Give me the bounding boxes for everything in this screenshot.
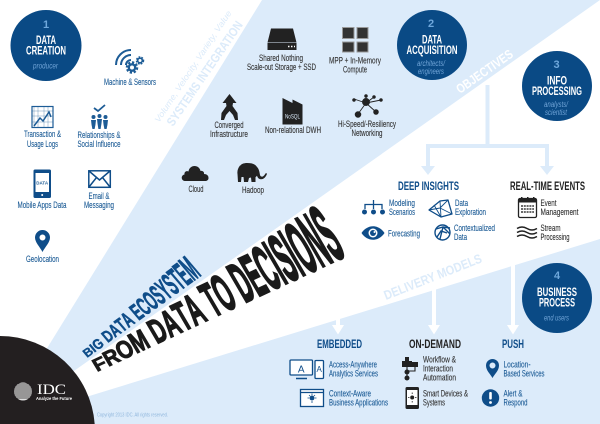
circle 4: business process: 4 xyxy=(554,270,561,282)
label: modeling scenarios: Modeling xyxy=(389,198,415,208)
icon: geolocation pin xyxy=(35,230,50,252)
label: alert and respond xyxy=(504,388,528,408)
title: big data ecosystem: B xyxy=(80,344,96,360)
icon: forecasting eye xyxy=(362,226,384,240)
title: from data to decisions: A xyxy=(153,301,188,345)
title: big data ecosystem: T xyxy=(162,264,192,296)
circle 1: data creation: DATA xyxy=(36,35,56,47)
heading: on-demand: ON-DEMAND xyxy=(409,339,461,351)
label: contextualized data: Data xyxy=(454,232,468,242)
label: converged infrastructure: Infrastructure xyxy=(210,129,248,139)
label: workflow automation: Interaction xyxy=(423,364,453,374)
title: big data ecosystem: T xyxy=(111,314,132,336)
heading: embedded: EMBEDDED xyxy=(317,339,362,351)
label: workflow automation xyxy=(423,354,456,382)
circle 2: data acquisition xyxy=(397,10,467,80)
icon: alert xyxy=(482,389,499,407)
icon: stream waves xyxy=(517,227,537,238)
label: modeling scenarios xyxy=(389,198,415,217)
title: big data ecosystem: E xyxy=(166,257,199,292)
circle 3: info processing: scientist xyxy=(545,107,567,117)
icon: context-aware window xyxy=(300,390,324,406)
title: from data to decisions: O xyxy=(200,263,246,322)
title: big data ecosystem: S xyxy=(156,269,186,301)
circle 3: info processing: 3 xyxy=(553,59,560,71)
title: from data to decisions: I xyxy=(269,219,315,290)
circle 2: data acquisition: DATA xyxy=(422,34,442,46)
title: from data to decisions: F xyxy=(89,353,111,376)
label: smart devices: Smart Devices & xyxy=(423,388,468,398)
title: big data ecosystem: C xyxy=(131,294,157,321)
circle 3: info processing xyxy=(522,51,592,121)
icon: location pin xyxy=(486,359,499,378)
icon: NoSQL factory: NoSQL xyxy=(285,114,300,120)
band label: delivery models: DELIVERY MODELS xyxy=(382,251,484,303)
icon: data exploration xyxy=(429,200,452,217)
circle 4: business process xyxy=(522,263,592,333)
label: event management: Management xyxy=(540,207,579,217)
logo: IDC: Analyze the Future xyxy=(36,396,72,402)
heading: push: PUSH xyxy=(502,339,524,351)
icon: modeling scenarios xyxy=(362,200,385,214)
title: from data to decisions: T xyxy=(165,293,200,339)
icon: converged arrow xyxy=(221,94,238,120)
circle 1: data creation: CREATION xyxy=(26,46,66,58)
title: from data to decisions: A xyxy=(175,285,214,335)
icon: analytics monitor and tablet xyxy=(290,360,324,378)
label: location-based services: Based Services xyxy=(504,368,545,378)
label: workflow automation: Workflow & xyxy=(423,354,456,364)
title: big data ecosystem: E xyxy=(126,300,149,326)
icon: contextualized data globe xyxy=(435,225,450,240)
label: forecasting: Forecasting xyxy=(388,228,420,238)
icon: elephant xyxy=(237,163,267,182)
label: event management: Event xyxy=(540,198,557,208)
label: stream processing: Stream xyxy=(540,223,561,233)
label: transaction and usage logs: Transaction & xyxy=(24,129,61,139)
label: analytics services: Analytics Services xyxy=(329,368,378,378)
icon: relationships xyxy=(91,105,108,129)
label: analytics services xyxy=(329,360,378,378)
label: networking: Networking xyxy=(352,128,382,138)
circle 2: data acquisition: 2 xyxy=(428,18,434,30)
title: from data to decisions: C xyxy=(241,234,291,304)
label: data exploration xyxy=(455,198,486,217)
label: storage: Scale-out Storage + SSD xyxy=(247,62,316,72)
circle 1: data creation xyxy=(10,10,82,81)
title: from data to decisions: R xyxy=(99,344,124,371)
label: alert and respond: Respond xyxy=(504,398,528,408)
band label: systems integration: SYSTEMS INTEGRATION xyxy=(164,19,246,129)
icon: analytics monitor and tablet: A xyxy=(317,365,323,374)
circle 2: data acquisition: engineers xyxy=(418,66,444,76)
label: stream processing: Processing xyxy=(540,232,570,242)
title: big data ecosystem: G xyxy=(89,335,107,353)
title: from data to decisions: O xyxy=(272,208,329,288)
label: storage: Shared Nothing xyxy=(259,53,303,63)
label: hadoop: Hadoop xyxy=(242,185,264,195)
icon: smart device xyxy=(406,387,419,409)
label: contextualized data: Contextualized xyxy=(454,223,495,233)
arrows: delivery models xyxy=(332,260,519,334)
circle 1: data creation: producer xyxy=(32,60,59,70)
label: business applications: Context-Aware xyxy=(329,388,371,398)
title: from data to decisions xyxy=(89,191,356,376)
label: contextualized data xyxy=(454,223,495,242)
label: cloud: Cloud xyxy=(188,184,204,194)
circle 4: business process: end users xyxy=(544,312,569,322)
label: relationships and social influence: Relationships & xyxy=(78,130,120,140)
copyright: Copyright 2013 IDC. All rights reserved. xyxy=(97,412,168,418)
label: MPP compute xyxy=(329,56,381,74)
icon: workflow xyxy=(402,357,418,380)
label: data exploration: Exploration xyxy=(455,207,486,217)
title: big data ecosystem: Y xyxy=(149,274,178,305)
icon: transaction chart xyxy=(32,106,53,128)
label: email and messaging: Messaging xyxy=(84,200,114,210)
title: from data to decisions: S xyxy=(297,191,356,276)
title: from data to decisions: T xyxy=(192,275,231,328)
circle 4: business process: PROCESS xyxy=(539,298,575,310)
title: from data to decisions: D xyxy=(219,252,265,314)
icon: email xyxy=(89,171,110,187)
label: event management xyxy=(540,198,579,217)
circle 2: data acquisition: architects/ xyxy=(417,58,446,68)
title: big data ecosystem: M xyxy=(172,249,207,287)
label: transaction and usage logs xyxy=(24,129,61,149)
icon: NoSQL factory xyxy=(282,98,302,124)
label: geolocation: Geolocation xyxy=(26,254,59,264)
logo panel: black quarter circle xyxy=(0,336,95,424)
label: email and messaging: Email & xyxy=(88,191,110,201)
label: storage xyxy=(247,53,316,72)
title: from data to decisions: I xyxy=(253,229,297,297)
heading: deep insights: DEEP INSIGHTS xyxy=(398,181,459,193)
label: workflow automation: Automation xyxy=(423,372,456,382)
label: transaction and usage logs: Usage Logs xyxy=(27,139,58,149)
label: email and messaging xyxy=(84,191,114,210)
icon: analytics monitor and tablet: A xyxy=(298,364,305,376)
icon: event calendar xyxy=(518,197,536,218)
label: converged infrastructure xyxy=(210,120,248,139)
title: from data to decisions: M xyxy=(123,324,155,360)
icon: machine and sensors xyxy=(116,50,143,72)
icon: MPP chips xyxy=(342,28,368,52)
title: big data ecosystem: O xyxy=(137,286,165,316)
label: business applications: Business Applications xyxy=(329,398,388,408)
label: smart devices xyxy=(423,388,468,408)
title: from data to decisions: D xyxy=(142,311,175,351)
icon: storage xyxy=(268,28,296,50)
label: mobile apps data: Mobile Apps Data xyxy=(18,200,67,210)
label: location-based services: Location- xyxy=(504,360,530,370)
band label: objectives: OBJECTIVES xyxy=(453,46,516,96)
title: big data ecosystem: S xyxy=(144,280,171,310)
label: stream processing xyxy=(540,223,570,242)
circle 2: data acquisition: ACQUISITION xyxy=(406,45,458,57)
icon: mobile apps: DATA xyxy=(36,180,49,186)
icon: network xyxy=(353,95,382,117)
title: from data to decisions: S xyxy=(257,221,309,295)
label: MPP compute: MPP + In-Memory xyxy=(329,56,381,66)
label: relationships and social influence xyxy=(78,130,120,149)
title: from data to decisions: N xyxy=(286,200,344,282)
label: machine and sensors: Machine & Sensors xyxy=(104,77,156,87)
title: from data to decisions: E xyxy=(230,242,277,308)
title: big data ecosystem: A xyxy=(116,308,139,332)
label: MPP compute: Compute xyxy=(343,64,367,74)
logo: IDC: IDC xyxy=(37,382,66,398)
panel: lower light blue band xyxy=(60,239,600,424)
label: smart devices: Systems xyxy=(423,398,445,408)
title: big data ecosystem xyxy=(80,249,207,360)
arrows: objectives split xyxy=(421,85,554,175)
label: location-based services xyxy=(504,360,545,378)
label: networking xyxy=(338,119,396,138)
label: converged infrastructure: Converged xyxy=(214,120,244,130)
icon: mobile apps xyxy=(34,170,51,198)
icon: cloud xyxy=(182,166,208,181)
label: networking: Hi-Speed/-Resiliency xyxy=(338,119,396,129)
circle 3: info processing: analysts/ xyxy=(544,99,569,109)
circle 3: info processing: INFO xyxy=(547,76,567,88)
circle 4: business process: BUSINESS xyxy=(537,287,577,299)
logo: IDC xyxy=(12,382,72,402)
label: alert and respond: Alert & xyxy=(504,388,522,398)
label: non-relational DWH: Non-relational DWH xyxy=(265,125,321,135)
label: business applications xyxy=(329,388,388,408)
title: from data to decisions: O xyxy=(110,334,139,365)
circle 1: data creation: 1 xyxy=(43,19,49,31)
band label: systems integration: Volume, Velocity, Variety, Value xyxy=(152,8,234,124)
label: data exploration: Data xyxy=(455,198,469,208)
label: relationships and social influence: Social Influence xyxy=(78,139,120,149)
label: modeling scenarios: Scenarios xyxy=(389,207,415,217)
title: big data ecosystem: D xyxy=(98,326,118,347)
title: big data ecosystem: A xyxy=(105,321,126,341)
label: analytics services: Access-Anywhere xyxy=(329,360,377,370)
title: big data ecosystem: I xyxy=(86,341,99,355)
